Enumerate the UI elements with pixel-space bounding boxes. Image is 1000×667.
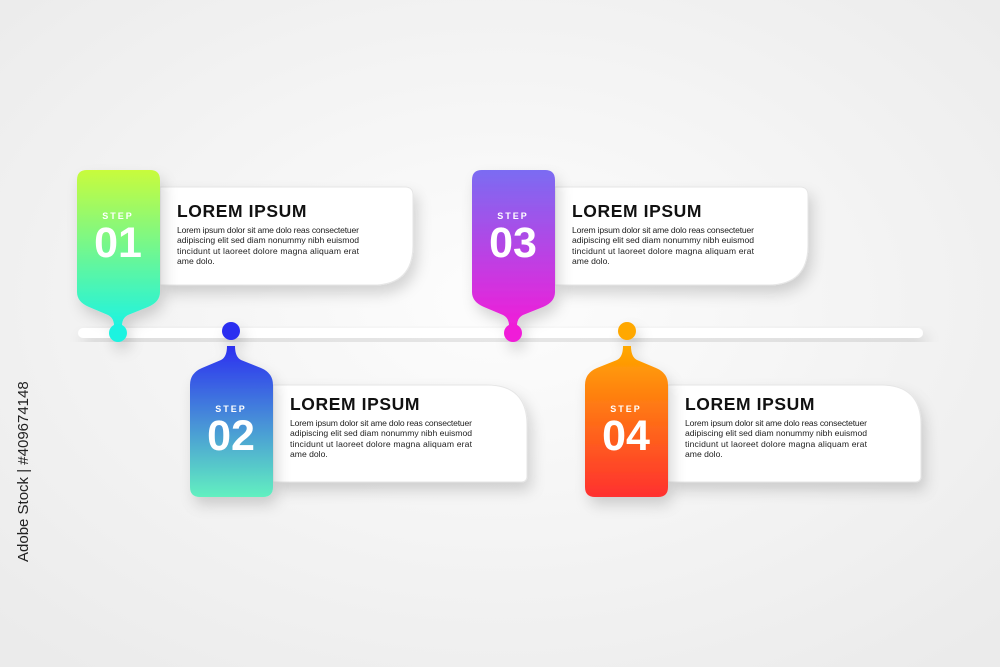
- text: step 01: tincidunt ut laoreet dolore magna aliquam erat: [177, 246, 360, 256]
- text: step 03: Lorem ipsum dolor sit ame dolo reas consectetuer: [572, 225, 754, 235]
- step 03: [472, 170, 808, 342]
- label: step 03 number: 03: [489, 219, 537, 267]
- panel: step 04 text box: [668, 385, 921, 482]
- text: step 02: LOREM IPSUM: [290, 394, 420, 414]
- label: step 02 number: STEP: [215, 404, 247, 414]
- panel: step 03 text box: [555, 187, 808, 285]
- text: step 04: tincidunt ut laoreet dolore magna aliquam erat: [685, 439, 868, 449]
- text: step 01: ame dolo.: [177, 256, 215, 266]
- tag: step 01: [77, 170, 160, 342]
- label: step 04 number: 04: [602, 412, 650, 460]
- text: step 01: Lorem ipsum dolor sit ame dolo reas consectetuer: [177, 225, 359, 235]
- label: step 04 number: STEP: [610, 404, 642, 414]
- text: step 04: LOREM IPSUM: [685, 394, 815, 414]
- text: step 02: tincidunt ut laoreet dolore magna aliquam erat: [290, 439, 473, 449]
- text: step 04: Lorem ipsum dolor sit ame dolo reas consectetuer: [685, 418, 867, 428]
- text: step 02: ame dolo.: [290, 449, 328, 459]
- tag: step 02: [190, 322, 273, 497]
- text: step 02: [290, 394, 473, 459]
- watermark id: Adobe Stock | #409674148: [15, 381, 32, 562]
- step 01: [77, 170, 413, 342]
- text: step 03: [572, 201, 755, 266]
- label: step 02 number: 02: [207, 412, 255, 460]
- step 04: [585, 322, 921, 497]
- text: step 04: adipiscing elit sed diam nonummy nibh euismod: [685, 428, 867, 438]
- label: step 01 number: 01: [94, 219, 142, 267]
- tag: step 03: [472, 170, 555, 342]
- text: step 03: adipiscing elit sed diam nonummy nibh euismod: [572, 235, 754, 245]
- text: step 04: ame dolo.: [685, 449, 723, 459]
- text: step 01: adipiscing elit sed diam nonummy nibh euismod: [177, 235, 359, 245]
- text: step 01: LOREM IPSUM: [177, 201, 307, 221]
- step 02: [190, 322, 527, 497]
- text: step 03: LOREM IPSUM: [572, 201, 702, 221]
- text: step 02: adipiscing elit sed diam nonummy nibh euismod: [290, 428, 472, 438]
- text: step 01: [177, 201, 360, 266]
- timeline bar: [78, 328, 923, 338]
- text: step 02: Lorem ipsum dolor sit ame dolo reas consectetuer: [290, 418, 472, 428]
- text: step 03: tincidunt ut laoreet dolore magna aliquam erat: [572, 246, 755, 256]
- label: step 01 number: STEP: [102, 211, 134, 221]
- text: step 03: ame dolo.: [572, 256, 610, 266]
- panel: step 02 text box: [273, 385, 527, 482]
- text: step 04: [685, 394, 868, 459]
- label: step 03 number: STEP: [497, 211, 529, 221]
- panel: step 01 text box: [160, 187, 413, 285]
- tag: step 04: [585, 322, 668, 497]
